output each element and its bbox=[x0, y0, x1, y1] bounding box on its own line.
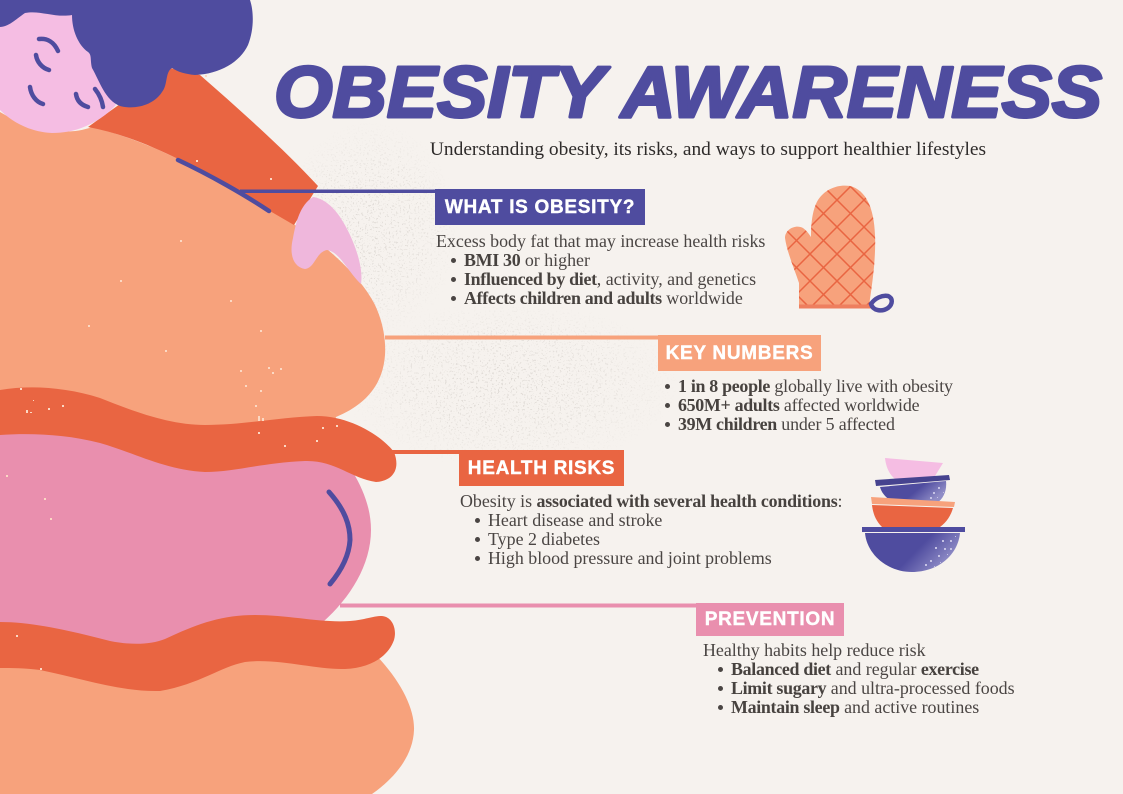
text: what is obesity: BMI 30 or higher bbox=[464, 250, 590, 270]
body speckle bbox=[6, 75, 338, 670]
heading: key numbers bbox=[658, 335, 821, 371]
icon: stacked bowls bbox=[862, 458, 965, 572]
text: health risks: High blood pressure and joint problems bbox=[488, 548, 772, 568]
face marks bbox=[30, 39, 103, 107]
orange fold one bbox=[0, 387, 396, 482]
text: key numbers: 650M+ adults affected worldwide bbox=[678, 395, 919, 415]
hair bbox=[0, 0, 253, 107]
orange fold two bbox=[0, 615, 395, 691]
heading: what is obesity: WHAT IS OBESITY? bbox=[445, 196, 635, 218]
text: prevention: Maintain sleep and active routines bbox=[731, 697, 979, 717]
text: what is obesity bbox=[436, 231, 765, 308]
text: key numbers: 1 in 8 people globally live with obesity bbox=[678, 376, 953, 396]
text: key numbers: 39M children under 5 affected bbox=[678, 414, 895, 434]
text: prevention: Balanced diet and regular exercise bbox=[731, 659, 979, 679]
heading: health risks: HEALTH RISKS bbox=[468, 458, 615, 478]
text: health risks: Heart disease and stroke bbox=[488, 510, 662, 530]
body: lower section bbox=[0, 640, 414, 794]
heading: health risks bbox=[459, 450, 624, 486]
text: what is obesity: Influenced by diet, activity, and genetics bbox=[464, 269, 756, 289]
text: health risks bbox=[460, 491, 842, 568]
hand bbox=[292, 197, 361, 284]
connector lines bbox=[240, 190, 700, 608]
face bbox=[0, 12, 116, 133]
text: prevention bbox=[703, 640, 1015, 717]
background speckle bbox=[314, 142, 646, 450]
body: upper section bbox=[0, 112, 385, 440]
text: health risks: Type 2 diabetes bbox=[488, 529, 600, 549]
text: prevention: Healthy habits help reduce risk bbox=[703, 640, 926, 660]
sleeve fold line bbox=[178, 160, 269, 211]
text: key numbers bbox=[665, 376, 953, 434]
heading: what is obesity bbox=[435, 189, 645, 225]
sleeve bbox=[88, 68, 318, 225]
text: health risks: Obesity is associated with several health conditions: bbox=[460, 491, 842, 511]
belly curve line bbox=[329, 492, 350, 584]
icon: oven mitt bbox=[785, 186, 894, 313]
text: what is obesity: Affects children and adults worldwide bbox=[464, 288, 743, 308]
heading: prevention: PREVENTION bbox=[705, 609, 835, 630]
heading: key numbers: KEY NUMBERS bbox=[666, 342, 813, 364]
text: prevention: Limit sugary and ultra-processed foods bbox=[731, 678, 1015, 698]
body: pink midsection bbox=[0, 420, 371, 660]
subtitle: Understanding obesity, its risks, and ways to support healthier lifestyles bbox=[430, 139, 986, 160]
title: OBESITY AWARENESS bbox=[274, 53, 1102, 133]
text: what is obesity: Excess body fat that may increase health risks bbox=[436, 231, 765, 251]
heading: prevention bbox=[696, 603, 844, 636]
